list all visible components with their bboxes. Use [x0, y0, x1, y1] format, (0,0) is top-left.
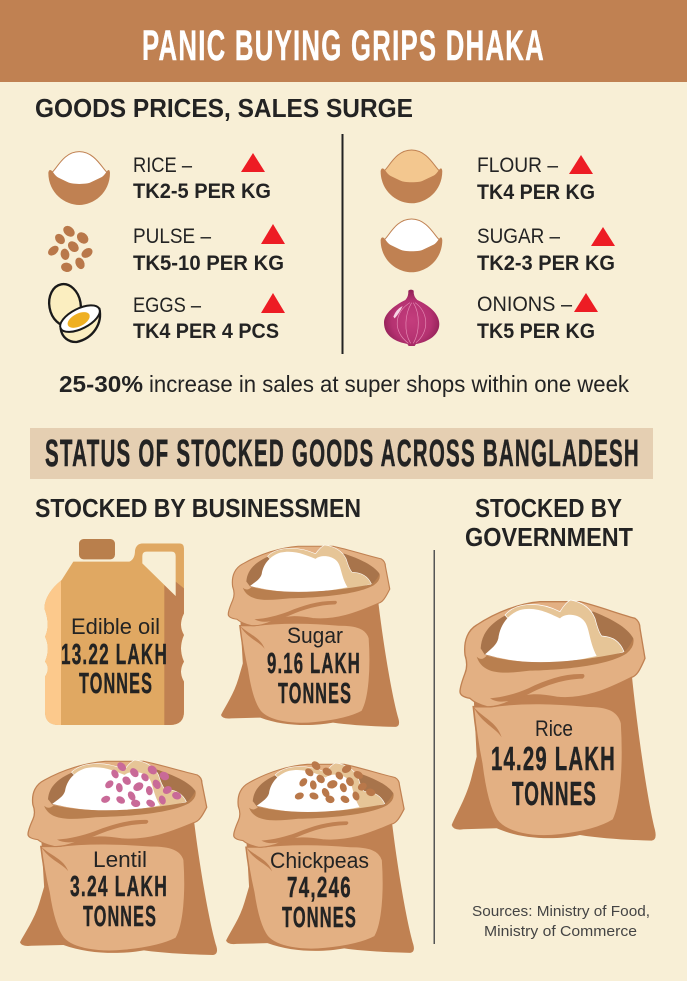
icon: eggs: [46, 282, 104, 342]
price item: flour: [381, 150, 595, 204]
panel: sugar sack: TONNES: [278, 678, 352, 710]
divider between price columns: [342, 134, 344, 354]
sales increase note: 25-30%: [59, 371, 143, 397]
icon: onion: [384, 290, 439, 346]
header banner: [0, 0, 687, 82]
price item: rice: [48, 152, 271, 205]
panel: sugar sack: 9.16 LAKH: [267, 648, 361, 680]
panel: lentil sack: Lentil: [93, 847, 147, 872]
icon: lentil sack: [20, 760, 217, 955]
panel: edible oil jug: TONNES: [79, 668, 153, 700]
sources note: Sources: Ministry of Food,: [472, 903, 650, 920]
sources note: [472, 903, 650, 940]
icon: up arrow sugar: [591, 227, 615, 246]
panel: chickpeas sack: Chickpeas: [270, 848, 369, 873]
panel: lentil sack: TONNES: [83, 901, 157, 933]
panel: sugar sack: Sugar: [287, 623, 343, 648]
heading: goods prices: GOODS PRICES, SALES SURGE: [35, 93, 413, 123]
icon: sugar sack: [221, 545, 399, 727]
price item: eggs: TK4 PER 4 PCS: [133, 320, 279, 343]
price item: sugar: TK2-3 PER KG: [477, 252, 615, 275]
panel: edible oil jug: [44, 539, 184, 725]
panel: lentil sack: 3.24 LAKH: [70, 871, 168, 903]
sources note: Ministry of Commerce: [484, 923, 637, 940]
panel: chickpeas sack: [226, 760, 414, 953]
heading: stocked by businessmen: STOCKED BY BUSINESSMEN: [35, 493, 361, 523]
panel: rice sack: Rice: [535, 716, 573, 741]
price item: eggs: EGGS –: [133, 294, 201, 317]
icon: flour bowl: [381, 150, 442, 203]
panel: edible oil jug: 13.22 LAKH: [61, 639, 168, 671]
panel: edible oil jug: Edible oil: [71, 614, 160, 639]
panel: rice sack: TONNES: [512, 775, 597, 812]
icon: up arrow rice: [241, 153, 265, 172]
icon: chickpea seeds: [294, 760, 376, 805]
heading: stocked by government: STOCKED BY: [475, 493, 622, 523]
price item: pulse: [46, 224, 285, 275]
price item: onions: ONIONS –: [477, 293, 572, 316]
panel: chickpeas sack: 74,246: [287, 872, 352, 904]
icon: up arrow onions: [574, 293, 598, 312]
icon: chickpeas sack: [226, 763, 414, 953]
icon: pulse seeds: [46, 224, 94, 273]
price item: sugar: SUGAR –: [477, 225, 560, 248]
icon: up arrow pulse: [261, 224, 285, 244]
icon: up arrow eggs: [261, 293, 285, 313]
price item: rice: TK2-5 PER KG: [133, 180, 271, 203]
sales increase note: increase in sales at super shops within one week: [149, 371, 629, 397]
icon: rice sack: [452, 600, 656, 841]
panel: chickpeas sack: TONNES: [282, 902, 357, 934]
heading: stocked by government: GOVERNMENT: [465, 522, 633, 552]
price item: flour: FLOUR –: [477, 154, 558, 177]
panel: rice sack: [452, 600, 656, 841]
heading: stocked by government: [465, 493, 633, 552]
price item: rice: RICE –: [133, 154, 192, 177]
icon: lentil seeds: [100, 761, 182, 809]
price item: onions: [384, 290, 598, 346]
price item: sugar: [381, 219, 615, 275]
icon: rice bowl: [48, 152, 110, 205]
icon: sugar bowl: [381, 219, 442, 272]
divider before government column: [434, 550, 435, 944]
price item: pulse: PULSE –: [133, 225, 211, 248]
price item: eggs: [46, 282, 285, 343]
price item: flour: TK4 PER KG: [477, 181, 595, 204]
icon: oil jug: [44, 539, 184, 725]
price item: onions: TK5 PER KG: [477, 320, 595, 343]
panel: lentil sack: [20, 760, 217, 955]
price item: pulse: TK5-10 PER KG: [133, 252, 284, 275]
panel: sugar sack: [221, 545, 399, 727]
icon: up arrow flour: [569, 155, 593, 174]
